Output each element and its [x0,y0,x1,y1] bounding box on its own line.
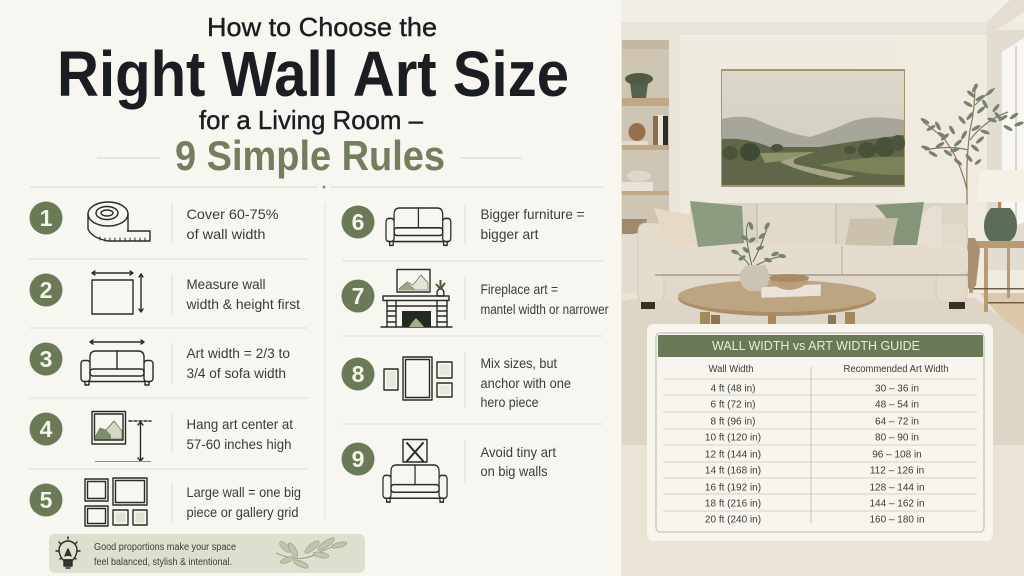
text: rule 7: mantel width or narrower [480,301,609,317]
number badge 4: 4 [40,416,53,442]
number badge 5: 5 [40,487,53,513]
table rows: 112 – 126 in [870,466,924,476]
side table [967,238,1024,312]
text: rule 1: of wall width [186,226,266,242]
table rows: 48 – 54 in [875,400,919,410]
text: rule 2: width & height first [186,296,300,312]
tip text: feel balanced, stylish & intentional. [94,557,232,568]
table rows [705,384,925,526]
text: rule 4 [186,416,293,452]
table card: wall width vs art width [647,324,993,541]
text: rule 7: Fireplace art = [480,281,558,297]
built-in shelves [621,33,680,293]
number badge 6 [342,206,374,238]
text: rule 8 [480,355,571,410]
seat cushions [654,244,844,275]
table grid [663,367,977,523]
table rows: 12 ft (144 in) [705,450,761,460]
rule 6 [342,204,584,245]
title line: Right Wall Art Size: Right Wall Art Size [57,38,569,110]
number badge 5 [30,484,62,516]
table rows: 4 ft (48 in) [710,384,756,394]
icon: measuring tape [88,202,150,241]
rule 4 [30,412,293,462]
table rows: 30 – 36 in [875,384,919,394]
framed landscape art [721,69,905,187]
table rows: 144 – 162 in [869,498,925,510]
text: rule 9: on big walls [480,463,548,479]
table lamp [977,170,1024,243]
text: rule 6: Bigger furniture = [480,206,584,222]
table rows: 10 ft (120 in) [705,432,761,444]
table header bar [658,335,983,357]
table rows: 6 ft (72 in) [710,400,756,410]
sofa feet [641,302,655,309]
number badge 3: 3 [40,346,52,372]
tip text: Good proportions make your space [94,542,236,553]
text: rule 8: anchor with one [480,375,571,391]
number badge 8 [342,358,374,390]
text: rule 5: piece or gallery grid [186,504,298,520]
rule 7 [342,270,609,327]
room photo illustration [621,0,1024,576]
rule 9 [342,440,556,502]
number badge 2 [30,274,62,306]
floor [621,293,1024,576]
book and bowl [761,274,821,298]
table column headings [708,364,948,375]
number badge 6: 6 [352,209,364,235]
icon: large sofa [386,208,451,245]
icon: tiny art crossed out above sofa [383,440,447,502]
icon: sofa with width arrow [81,340,153,385]
text: rule 1: Cover 60-75% [186,206,278,222]
number badge 9 [342,442,374,476]
rule 2 [30,271,300,314]
number badge 4 [30,412,62,446]
rule 5 [30,478,301,526]
icon: wall with dimensions [92,271,143,314]
number badge 9: 9 [352,446,364,472]
text: rule 4: 57-60 inches high [186,436,292,452]
left panel background [0,0,621,576]
text: rule 4: Hang art center at [186,416,293,432]
table rows: 18 ft (216 in) [705,498,761,510]
text: rule 6 [480,206,584,242]
icon: leaf sprig [276,536,347,570]
shelf vase [628,123,646,141]
number badge 8: 8 [352,361,365,387]
wall and ceiling [621,0,1024,576]
number badge 3 [30,342,62,376]
table rows: 96 – 108 in [872,450,922,460]
number badge 2: 2 [40,277,52,303]
text: rule 3: 3/4 of sofa width [186,365,286,381]
icon: gallery grid [85,478,147,526]
table rows: 16 ft (192 in) [705,482,761,494]
text: rule 2: Measure wall [186,276,266,292]
number badge 1: 1 [40,205,53,231]
text: rule 9: Avoid tiny art [480,444,556,460]
shelf plant [630,83,648,98]
title line: 9 Simple Rules: 9 Simple Rules [175,132,445,179]
icon: light bulb [56,537,80,568]
text: rule 8: hero piece [480,394,539,410]
rule 1 [30,202,278,243]
text: rule 7 [480,281,609,317]
icon: fireplace with art [381,270,452,327]
number badge 1 [30,202,62,234]
title line: for a Living Room: for a Living Room – [199,105,424,135]
icon: mixed size frames [384,357,452,400]
text: rule 5: Large wall = one big [186,484,301,500]
olive tree [920,83,1024,238]
text: rule 1 [186,206,278,242]
number badge 7: 7 [352,283,364,309]
shelf bowl and books [627,170,651,182]
table rows: 20 ft (240 in) [705,514,761,526]
title [57,12,569,179]
text: rule 9 [480,444,556,479]
table rows: 64 – 72 in [875,416,919,428]
text: rule 3 [186,345,290,381]
callout: proportions tip [49,534,365,573]
sofa [638,203,968,309]
vase with branches [731,222,786,291]
cushions [654,201,942,250]
icon: framed art hanging height [92,412,151,462]
rug [622,298,1024,445]
sofa base [650,272,948,302]
table rows: 128 – 144 in [869,482,925,494]
shelf books [653,116,658,145]
table header bar: WALL WIDTH vs ART WIDTH GUIDE [712,338,920,353]
lower bowl [622,219,647,234]
coffee table [678,280,876,325]
table rows: 80 – 90 in [875,432,919,444]
text: rule 3: Art width = 2/3 to [186,345,290,361]
rule 3 [30,340,290,385]
title line: How to Choose the: How to Choose the [207,12,437,42]
number badge 7 [342,280,374,312]
text: rule 8: Mix sizes, but [480,355,557,371]
table column headings: Wall Width [708,364,754,375]
text: rule 2 [186,276,300,312]
text: rule 5 [186,484,301,520]
table column headings: Recommended Art Width [844,364,948,375]
text: rule 6: bigger art [480,226,539,242]
tip text [94,542,236,568]
rule 8 [342,352,571,410]
table rows: 14 ft (168 in) [705,466,761,476]
table rows: 8 ft (96 in) [710,416,756,428]
table rows: 160 – 180 in [869,514,925,526]
